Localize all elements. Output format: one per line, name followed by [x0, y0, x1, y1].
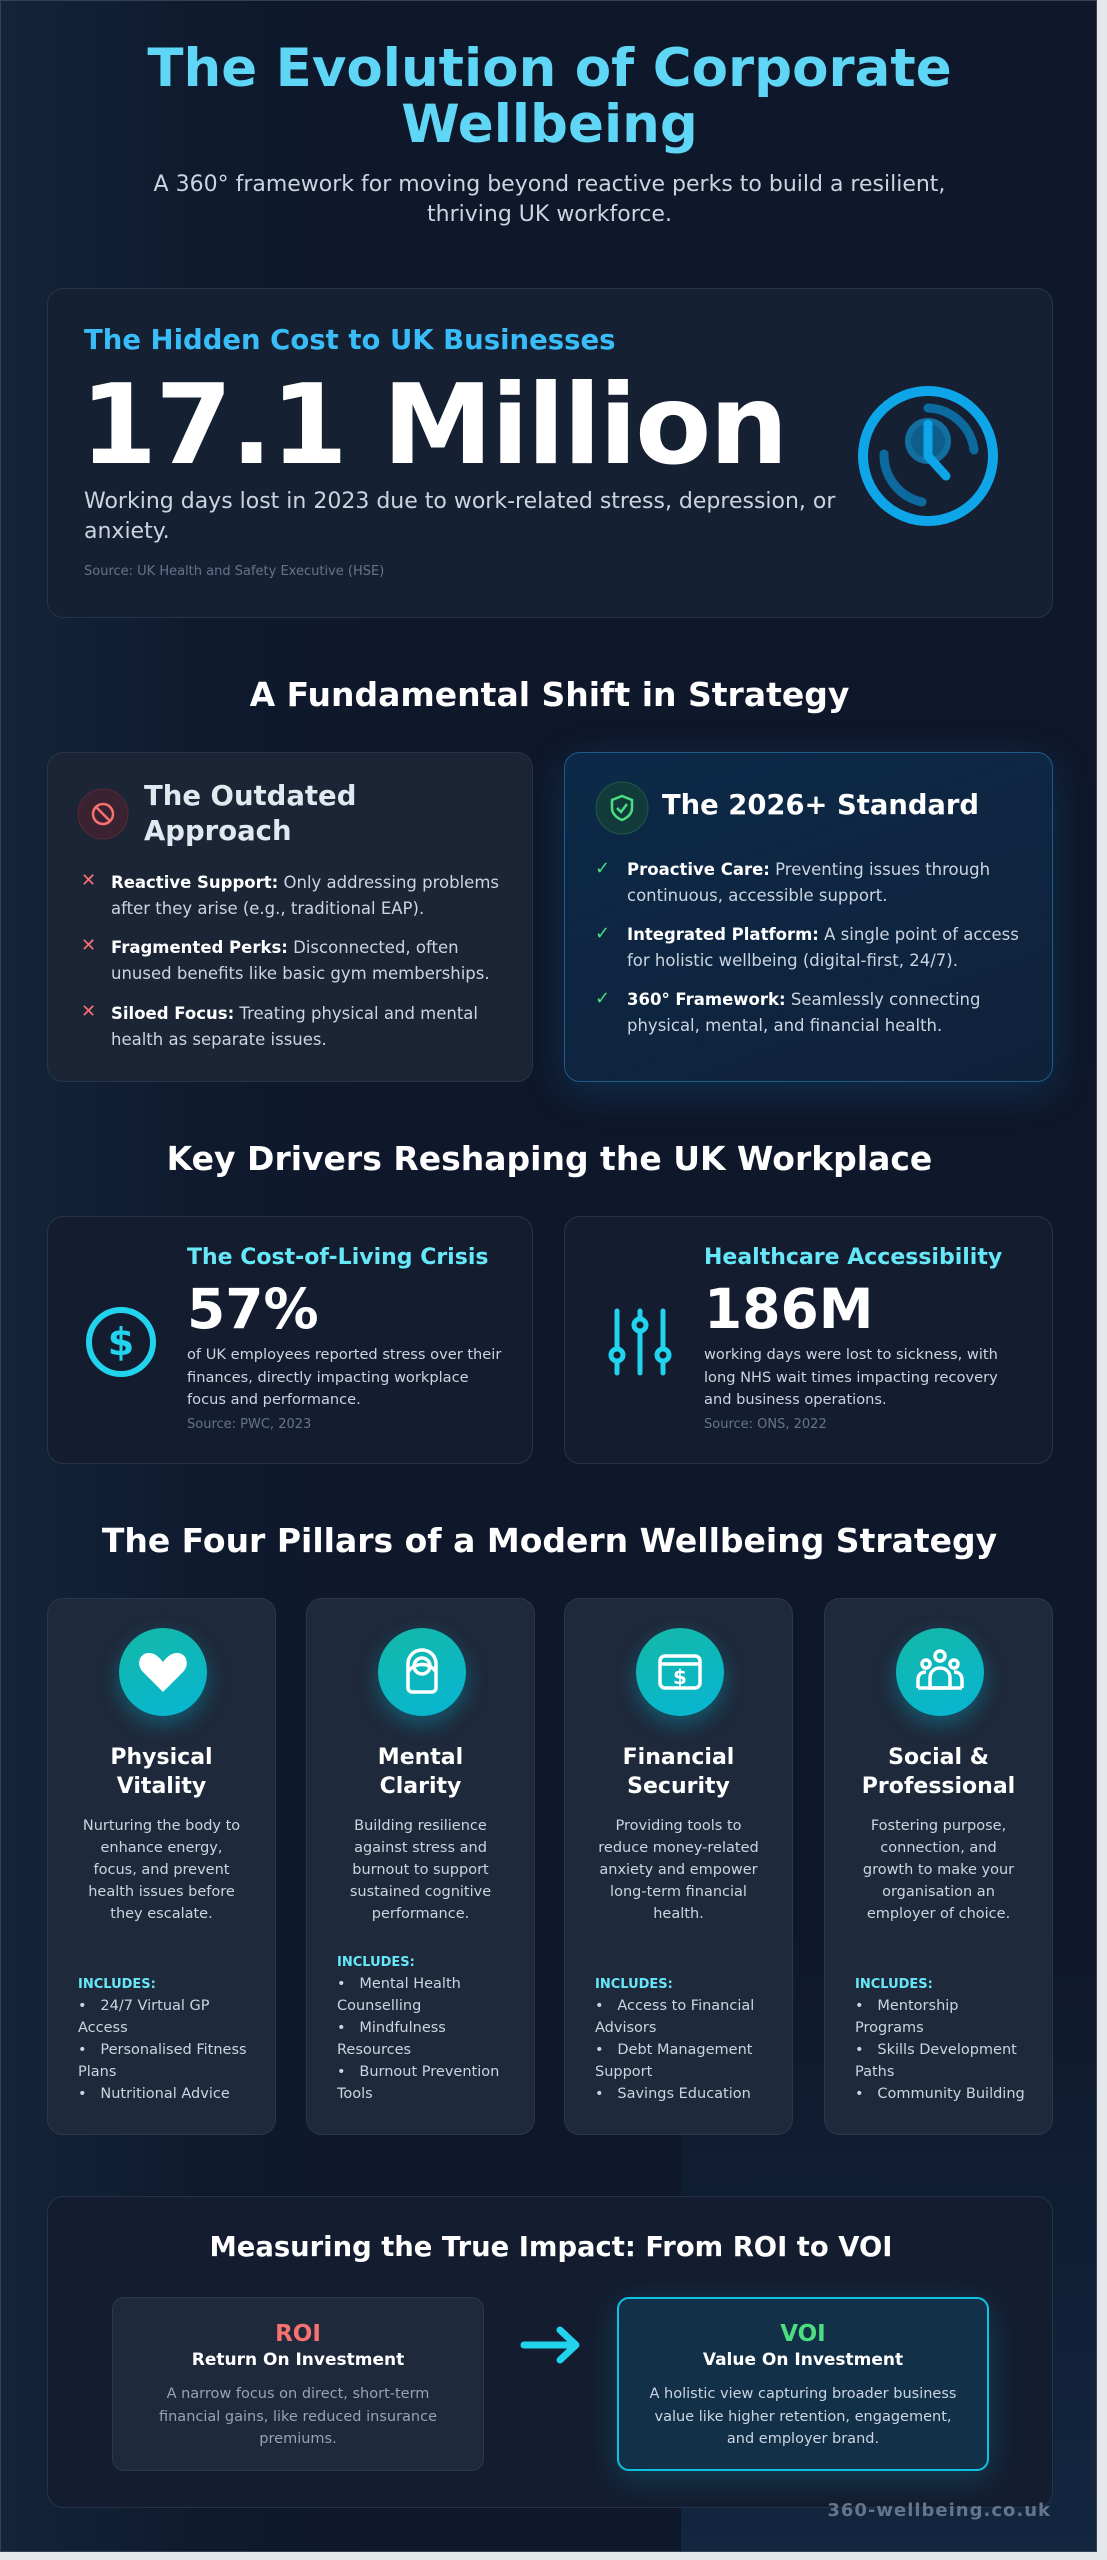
heading: fundamental shift: A Fundamental Shift in Strategy: [250, 675, 849, 714]
pillar: social: • Community Building: [855, 2086, 1025, 2102]
pillar: social: • Mentorship Programs: [855, 1998, 958, 2036]
icon: mind: [378, 1628, 466, 1716]
pillar: social: • Skills Development Paths: [855, 2042, 1017, 2080]
heading: outdated: Approach: [144, 815, 292, 847]
pillar: physical: Nurturing the body to enhance energy, focus, and prevent health issues before they escalate.: [83, 1818, 240, 1922]
heading: four pillars: The Four Pillars of a Modern Wellbeing Strategy: [102, 1521, 997, 1560]
pillar: mental: Clarity: [380, 1774, 461, 1799]
pillar: financial: Security: [627, 1774, 730, 1799]
panel: outdated approach: [47, 752, 533, 1082]
bullets: outdated: ✕: [81, 870, 96, 891]
pillar: financial: [564, 1598, 793, 2135]
bullets: outdated: Fragmented Perks: Disconnected, often unused benefits like basic gym memberships.: [111, 938, 490, 983]
subtitle: thriving UK workforce.: [427, 202, 672, 227]
description: Working days lost in 2023 due to work-related stress, depression, or anxiety.: [84, 489, 835, 544]
stat: 186M: [704, 1245, 1002, 1432]
bullets: standard: ✓: [595, 858, 610, 879]
bullets: outdated: [81, 870, 499, 1049]
icon: people: [896, 1628, 984, 1716]
bullets: outdated: Siloed Focus: Treating physical and mental health as separate issues.: [111, 1004, 478, 1049]
pillar: mental: • Burnout Prevention Tools: [337, 2064, 499, 2102]
bullets: standard: Integrated Platform: A single point of access for holistic wellbeing (digital-first, 24/7).: [627, 925, 1019, 970]
pillar: social: Fostering purpose, connection, and growth to make your organisation an employer of choice.: [863, 1818, 1014, 1922]
pillar: financial: • Debt Management Support: [595, 2042, 752, 2080]
heading: hidden cost: The Hidden Cost to UK Businesses: [84, 324, 615, 356]
big number: 17.1 Million: [80, 361, 786, 490]
pillar: mental: Mental: [378, 1745, 463, 1770]
icon: prohibited: [78, 788, 128, 840]
icon: dollar: $: [108, 1320, 134, 1364]
pillar: financial: Providing tools to reduce money-related anxiety and empower long-term financial health.: [598, 1818, 759, 1922]
box: VOI: Value On Investment: [703, 2350, 903, 2370]
pillar: physical: INCLUDES:: [78, 1977, 156, 1992]
box: VOI: A holistic view capturing broader business value like higher retention, engagement, and employer brand.: [650, 2386, 956, 2447]
stat: 186M: Source: ONS, 2022: [704, 1417, 827, 1432]
heading: measuring impact: Measuring the True Impact: From ROI to VOI: [210, 2232, 892, 2263]
icon: dollar: [86, 1307, 156, 1377]
bullets: standard: [595, 858, 1019, 1035]
pillar: mental: Building resilience against stress and burnout to support sustained cognitive performance.: [350, 1818, 491, 1922]
pillar: physical: [47, 1598, 276, 2135]
bullets: outdated: ✕: [81, 1001, 96, 1022]
stat: 57%: Source: PWC, 2023: [187, 1417, 311, 1432]
footer: website: 360-wellbeing.co.uk: [827, 2500, 1051, 2521]
heading: outdated: The Outdated: [144, 780, 356, 812]
stat: 57%: [187, 1245, 502, 1432]
box: VOI: [617, 2297, 989, 2471]
bullets: standard: ✓: [595, 988, 610, 1009]
pillar: social: [824, 1598, 1053, 2135]
stat: 57%: 57%: [187, 1277, 319, 1341]
pillar: social: Professional: [862, 1774, 1015, 1799]
pillar: physical: • Nutritional Advice: [78, 2086, 230, 2102]
stat: 186M: 186M: [704, 1277, 874, 1341]
pillar: mental: [306, 1598, 535, 2135]
subtitle: A 360° framework for moving beyond reactive perks to build a resilient,: [154, 172, 945, 197]
box: ROI: Return On Investment: [192, 2350, 404, 2370]
arrow: [520, 2326, 580, 2364]
stat: 186M: Healthcare Accessibility: [704, 1245, 1002, 1270]
bullets: outdated: ✕: [81, 935, 96, 956]
icon: wallet: [636, 1628, 724, 1716]
pillar: mental: INCLUDES:: [337, 1955, 415, 1970]
pillar: physical: Vitality: [117, 1774, 206, 1799]
bullets: standard: Proactive Care: Preventing issues through continuous, accessible support.: [627, 860, 990, 905]
source: Source: UK Health and Safety Executive (HSE): [84, 564, 384, 579]
panel: 2026+ standard: [564, 752, 1053, 1082]
panel: cost of living: [47, 1216, 533, 1464]
box: ROI: ROI: [275, 2321, 321, 2347]
stat: 186M: working days were lost to sickness, with long NHS wait times impacting recovery and business operations.: [704, 1346, 998, 1408]
pillar: financial: • Access to Financial Advisors: [595, 1998, 754, 2036]
pillar: physical: • Personalised Fitness Plans: [78, 2042, 247, 2080]
pillar: mental: • Mindfulness Resources: [337, 2020, 446, 2058]
icon: clock: [858, 386, 998, 526]
title: The Evolution of Corporate: [147, 38, 952, 99]
bullets: standard: ✓: [595, 923, 610, 944]
box: ROI: [112, 2297, 484, 2471]
pillar: mental: • Mental Health Counselling: [337, 1976, 461, 2014]
panel: hidden cost: [47, 288, 1053, 618]
title: Wellbeing: [401, 94, 698, 155]
pillar: financial: Financial: [623, 1745, 734, 1770]
icon: shield: [596, 782, 648, 834]
stat: 57%: The Cost-of-Living Crisis: [187, 1245, 488, 1270]
subtitle: [154, 172, 945, 227]
pillar: physical: • 24/7 Virtual GP Access: [78, 1998, 210, 2036]
pillar: social: INCLUDES:: [855, 1977, 933, 1992]
bullets: outdated: Reactive Support: Only addressing problems after they arise (e.g., traditional EAP).: [111, 873, 499, 918]
heading: key drivers: Key Drivers Reshaping the UK Workplace: [167, 1139, 932, 1178]
pillar: physical: Physical: [110, 1745, 213, 1770]
heading: outdated: [144, 780, 356, 847]
box: VOI: VOI: [780, 2321, 826, 2347]
pillar: financial: INCLUDES:: [595, 1977, 673, 1992]
pillar: financial: • Savings Education: [595, 2086, 751, 2102]
title: [147, 38, 952, 155]
panel: healthcare: [564, 1216, 1053, 1464]
icon: heart: [119, 1628, 207, 1716]
box: ROI: A narrow focus on direct, short-term financial gains, like reduced insurance premiums.: [159, 2386, 437, 2447]
stat: 57%: of UK employees reported stress over their finances, directly impacting workplace focus and performance.: [187, 1346, 501, 1408]
pillar: social: Social &: [888, 1745, 989, 1770]
bullets: standard: 360° Framework: Seamlessly connecting physical, mental, and financial health.: [627, 990, 980, 1035]
heading: 2026: The 2026+ Standard: [662, 790, 979, 821]
icon: wallet: $: [673, 1665, 687, 1689]
panel: ROI to VOI: [47, 2196, 1053, 2508]
icon: sliders: [608, 1308, 672, 1376]
